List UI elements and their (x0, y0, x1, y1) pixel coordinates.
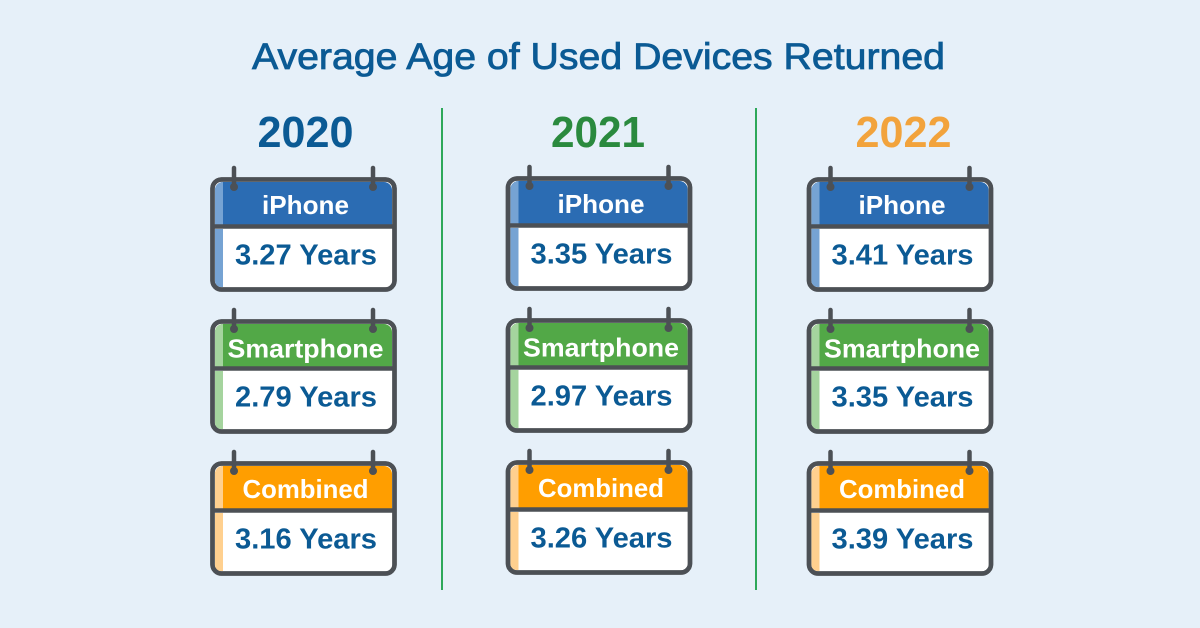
calendar card: Combined 2021: 3.26 Years (530, 522, 672, 554)
calendar card: iPhone 2022 (809, 168, 991, 290)
calendar card: iPhone 2022: iPhone (858, 190, 946, 220)
calendar card: iPhone 2021: iPhone (558, 189, 644, 219)
year heading 2021: 2021 (551, 108, 645, 157)
calendar card: Smartphone 2022: Smartphone (824, 334, 980, 364)
year heading 2020: 2020 (258, 108, 354, 157)
calendar card: iPhone 2021 (508, 167, 690, 288)
calendar card: Smartphone 2021 (508, 309, 690, 430)
year heading 2022: 2022 (856, 108, 952, 157)
calendar card: iPhone 2021: 3.35 Years (530, 238, 672, 270)
calendar card: Combined 2022 (809, 452, 991, 574)
calendar card: iPhone 2020 (212, 168, 394, 290)
calendar card: Smartphone 2021: 2.97 Years (530, 380, 672, 412)
calendar card: Combined 2022: Combined (839, 474, 965, 504)
calendar card: Combined 2021: Combined (538, 473, 664, 503)
calendar card: Smartphone 2022: 3.35 Years (832, 382, 974, 414)
calendar card: Smartphone 2022 (809, 310, 991, 432)
calendar card: Smartphone 2021: Smartphone (523, 332, 679, 362)
calendar card: Combined 2020 (212, 452, 394, 574)
title: Average Age of Used Devices Returned (252, 36, 945, 77)
calendar card: iPhone 2020: iPhone (262, 190, 349, 220)
calendar card: Smartphone 2020 (212, 310, 394, 432)
calendar card: Smartphone 2020: Smartphone (228, 334, 383, 364)
calendar card: Smartphone 2020: 2.79 Years (235, 382, 377, 414)
column: 2021 (508, 108, 690, 572)
calendar card: Combined 2020: Combined (242, 474, 368, 504)
calendar card: iPhone 2022: 3.41 Years (832, 240, 974, 272)
calendar card: iPhone 2020: 3.27 Years (235, 240, 377, 272)
calendar card: Combined 2022: 3.39 Years (832, 524, 974, 556)
column: 2020 (212, 108, 394, 574)
calendar card: Combined 2021 (508, 451, 690, 572)
calendar card: Combined 2020: 3.16 Years (235, 524, 377, 556)
column: 2022 (809, 108, 991, 574)
